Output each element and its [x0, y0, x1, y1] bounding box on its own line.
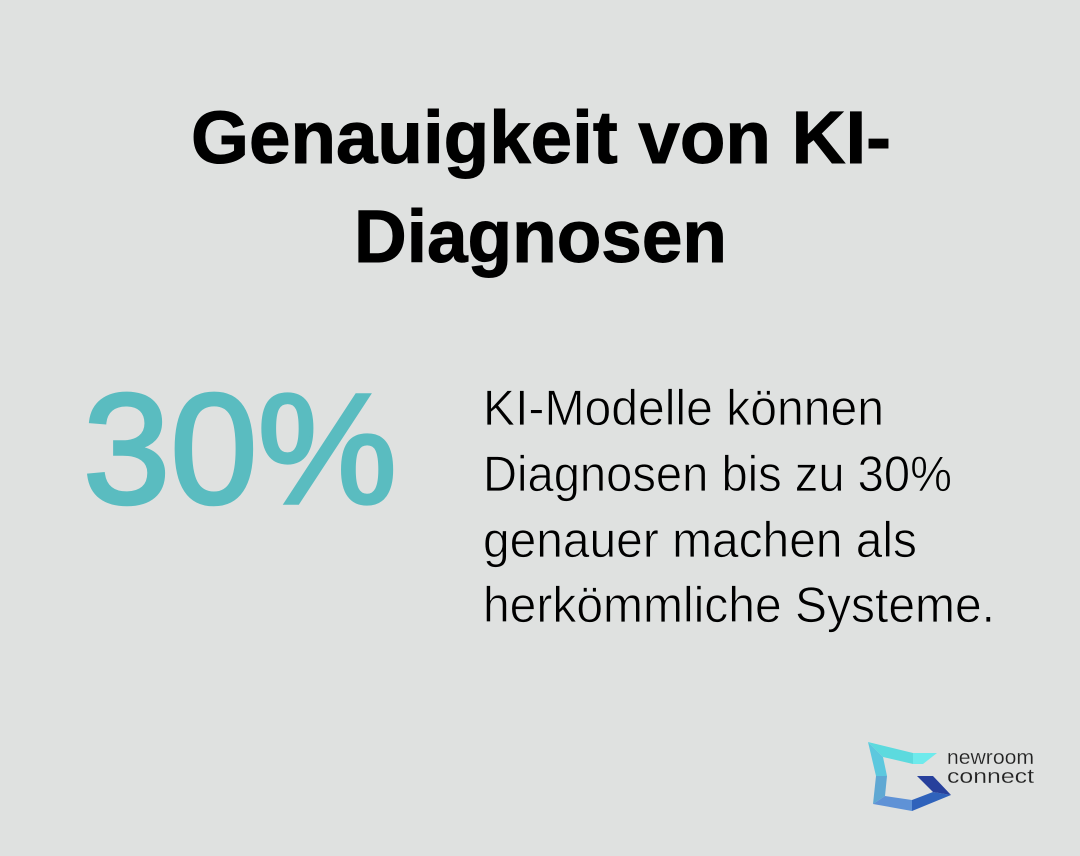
description text: genauer machen als	[483, 512, 917, 568]
title	[191, 96, 891, 278]
logo text: newroom	[947, 747, 1034, 769]
description text: KI-Modelle können	[483, 380, 884, 436]
description text: Diagnosen bis zu 30%	[483, 446, 952, 502]
big number: 30%: 30%	[83, 362, 397, 537]
description text: herkömmliche Systeme.	[483, 577, 995, 633]
title: Genauigkeit von KI-	[191, 96, 891, 179]
logo text: connect	[947, 766, 1035, 788]
icon: logo mark	[868, 742, 951, 811]
title: Diagnosen	[354, 195, 727, 278]
description text	[483, 380, 995, 633]
logo text	[947, 747, 1035, 788]
logo: newroom connect	[868, 742, 1035, 811]
